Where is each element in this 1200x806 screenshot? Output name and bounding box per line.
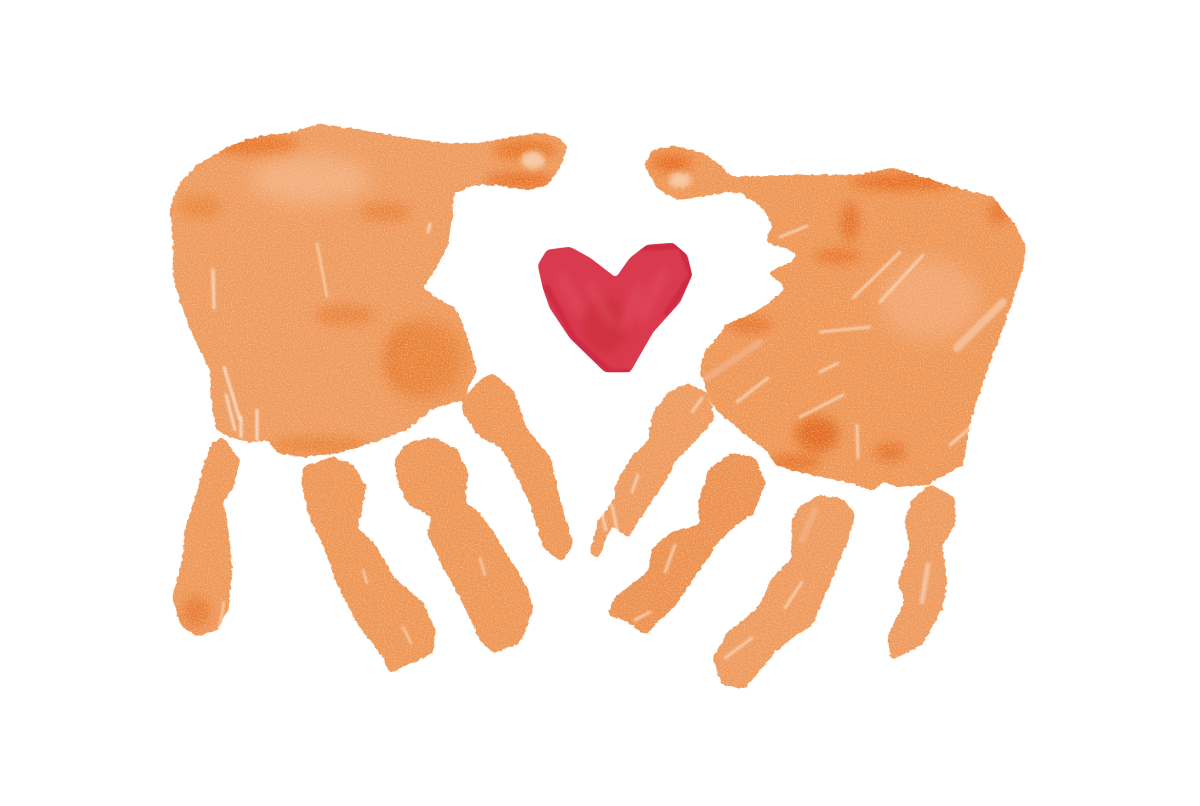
left ring finger (302, 457, 435, 673)
illustration: two orange handprints around a red heart (169, 124, 1026, 689)
right index finger (590, 383, 715, 560)
right handprint (590, 146, 1025, 688)
left index finger (462, 373, 573, 562)
left hand paint gaps (213, 224, 485, 643)
icon: red heart (538, 243, 692, 372)
left pinky finger (173, 438, 240, 636)
right pinky finger (887, 485, 955, 660)
right ring finger (713, 495, 855, 688)
right middle finger (608, 453, 765, 635)
left middle finger (395, 437, 533, 653)
right hand paint gaps (602, 226, 1003, 658)
left palm and thumb (170, 124, 567, 457)
left handprint (170, 124, 573, 673)
right palm and thumb (644, 146, 1025, 490)
